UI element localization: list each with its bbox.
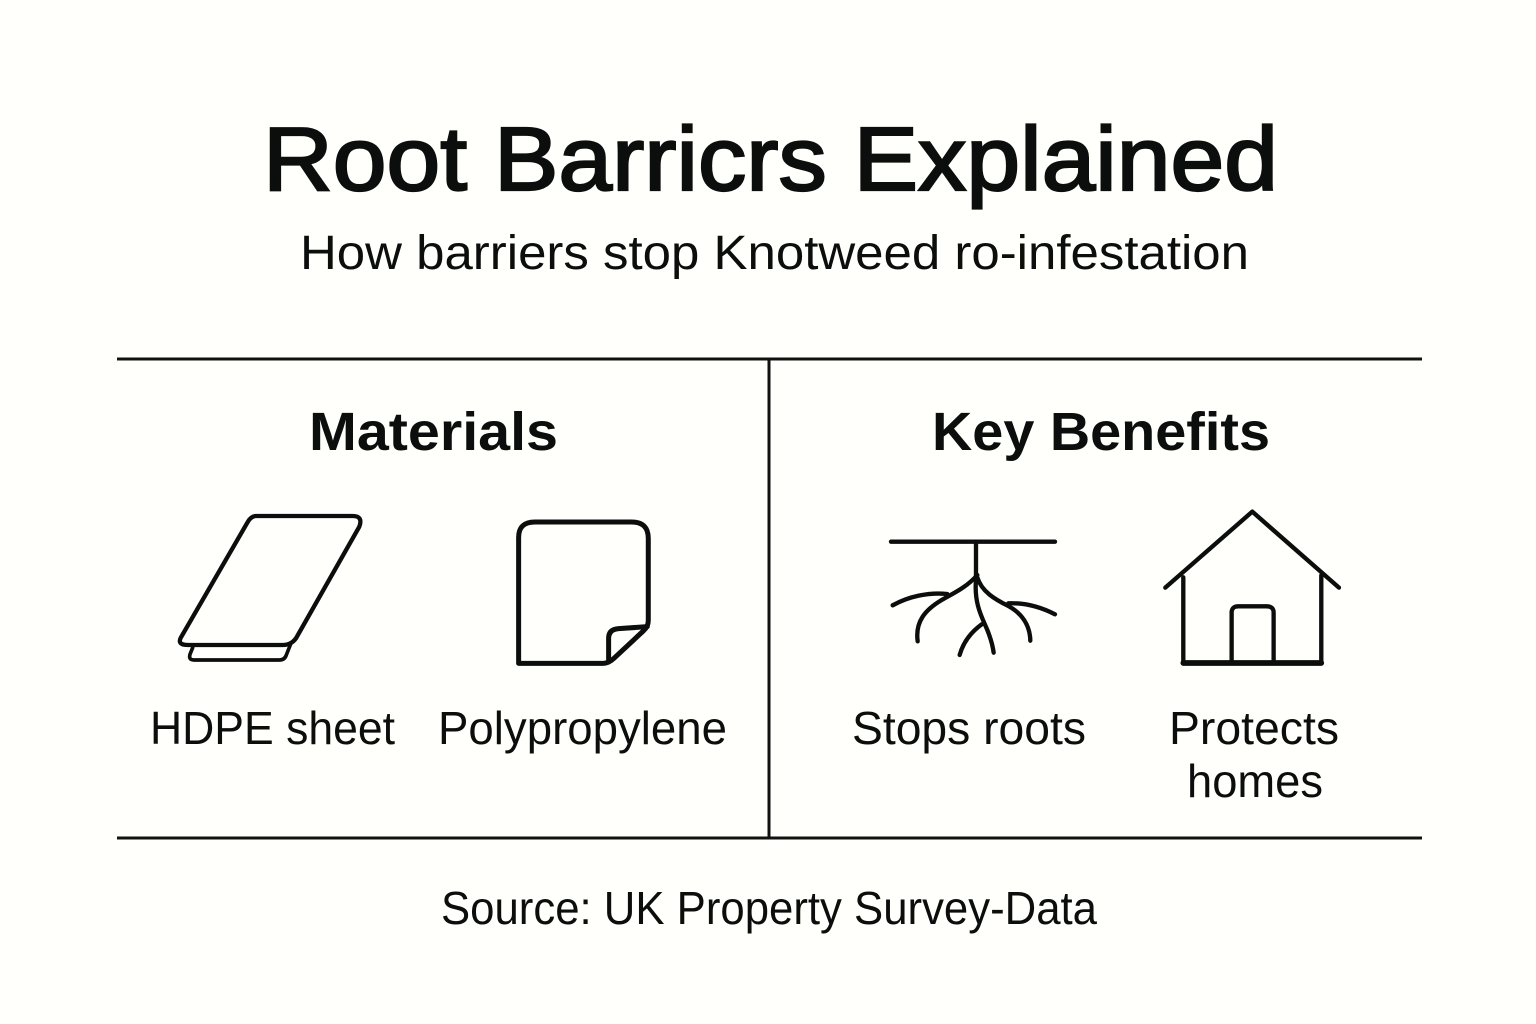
icon: roots under barrier [891,542,1055,655]
label: HDPE sheet: HDPE sheet [150,702,395,754]
frame lines [117,359,1422,838]
icon: polypropylene sheet [519,522,648,663]
panel: materials [150,402,727,754]
label: stops roots: Stops roots [852,702,1086,754]
heading: key benefits: Key Benefits [932,402,1270,462]
icon: house [1165,512,1339,663]
label: polypropylene: Polypropylene [438,702,727,754]
source note: Source: UK Property Survey-Data [441,882,1097,934]
label: protects homes [1169,702,1339,807]
icon: HDPE sheet [180,516,360,660]
title: Root Barricrs Explained [263,110,1278,210]
subtitle: How barriers stop Knotweed ro-infestation [300,227,1249,280]
panel: key benefits [852,402,1339,807]
label: protects homes: homes [1187,755,1323,807]
heading: materials: Materials [309,402,558,462]
label: protects homes: Protects [1169,702,1339,754]
